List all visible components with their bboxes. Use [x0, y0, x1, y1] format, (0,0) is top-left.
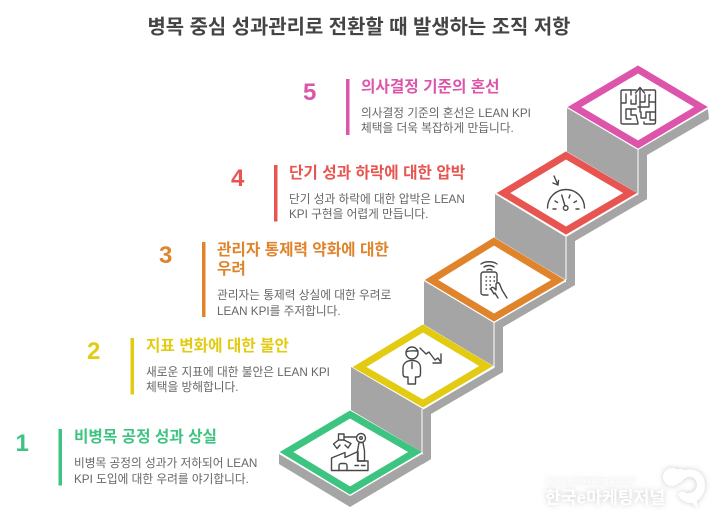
step 3 text: 관리자 통제력 약화에 대한: [217, 241, 389, 259]
icon: factory with robot arm: [332, 434, 368, 470]
icon: maze with up arrow: [621, 88, 656, 124]
step 3 text: [159, 241, 392, 318]
step 5 block: [567, 65, 709, 204]
step 5 text: 5: [303, 79, 316, 106]
step 1 text: 비병목 공정의 성과가 저하되어 LEAN: [74, 456, 257, 470]
step 1 text: 비병목 공정 성과 상실: [74, 428, 217, 446]
staircase: [279, 65, 709, 507]
step 3 text: 우려: [217, 260, 246, 278]
step 4 text: 단기 성과 하락에 대한 압박: [289, 164, 465, 182]
step 2 text: 지표 변화에 대한 불안: [146, 337, 289, 355]
watermark logo: [545, 468, 705, 508]
step 4 text: 4: [231, 165, 245, 192]
step 5 text: 의사결정 기준의 혼선은 LEAN KPI: [361, 107, 531, 120]
step 2 text: 체택을 방해합니다.: [146, 381, 239, 394]
step 5 text: [303, 78, 531, 135]
step 1 text: 1: [16, 430, 29, 457]
icon: gauge with down arrow: [548, 176, 584, 210]
step 5 text: 체택을 더욱 복잡하게 만듭니다.: [361, 121, 514, 135]
step 3 block: [424, 237, 575, 377]
watermark logo: 한국e마케팅저널: [545, 488, 665, 508]
step 5 text: 의사결정 기준의 혼선: [361, 78, 500, 96]
step 3 text: LEAN KPI를 주저합니다.: [217, 305, 341, 318]
step 2 block: [351, 324, 503, 464]
step 1 text: [16, 428, 257, 486]
icon: remote control with hand: [481, 262, 507, 298]
icon: person with falling trend: [403, 347, 441, 384]
title: 병목 중심 성과관리로 전환할 때 발생하는 조직 저항: [148, 16, 570, 38]
step 1 block: [279, 410, 431, 507]
step 4 text: [231, 164, 465, 222]
step 2 text: 2: [87, 338, 100, 365]
step 1 text: KPI 도입에 대한 우려를 야기합니다.: [74, 473, 249, 486]
step 4 text: 단기 성과 하락에 대한 압박은 LEAN: [289, 192, 465, 206]
step 4 text: KPI 구현을 어렵게 만듭니다.: [289, 208, 428, 221]
step 2 text: [87, 337, 330, 394]
step 3 text: 관리자는 통제력 상실에 대한 우려로: [217, 289, 392, 302]
step 4 block: [495, 151, 647, 290]
watermark logo: Korea e-Marketing Journal: [546, 476, 635, 485]
step 3 text: 3: [159, 242, 172, 269]
step 2 text: 새로운 지표에 대한 불안은 LEAN KPI: [146, 366, 330, 379]
